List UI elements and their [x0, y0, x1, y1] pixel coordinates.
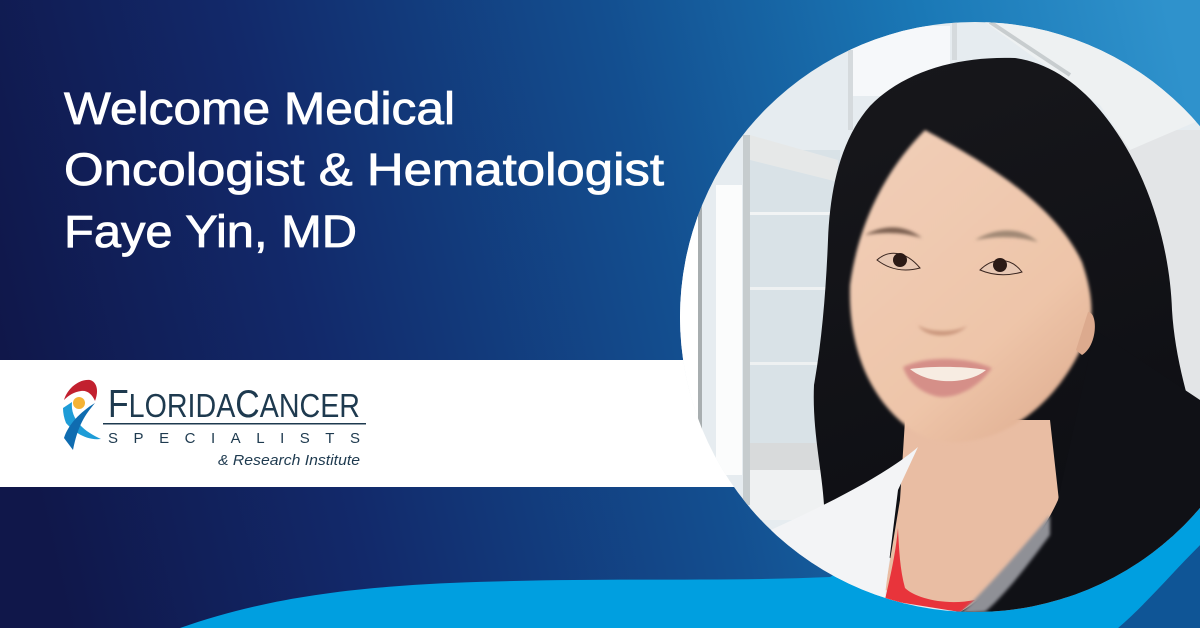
portrait photo: [670, 10, 1200, 628]
left brow: [865, 227, 922, 238]
headline: Welcome Medical: [64, 83, 455, 134]
white coat: [771, 447, 918, 604]
teeth: [910, 367, 986, 381]
face: [850, 130, 1092, 442]
left eye: [877, 253, 920, 270]
window background: [670, 10, 1200, 628]
headline: Faye Yin, MD: [64, 206, 357, 257]
right brow: [975, 230, 1038, 242]
bottom right corner: [1118, 545, 1200, 628]
ear: [1076, 312, 1095, 355]
lips: [903, 359, 992, 397]
red shirt: [885, 528, 975, 612]
logo: [63, 380, 366, 469]
neck: [885, 420, 1060, 612]
grey hair strands: [960, 515, 1050, 614]
headline: Oncologist & Hematologist: [64, 144, 665, 195]
logo wordmark: FLORIDACANCER: [108, 383, 360, 426]
logo subtitle: SPECIALISTS: [108, 430, 360, 447]
bottom wave: [180, 400, 1200, 628]
hair: [814, 58, 1200, 614]
logo icon: ribbon: [63, 380, 101, 450]
white logo band: [0, 360, 760, 487]
nose: [918, 325, 968, 336]
logo tagline: & Research Institute: [218, 452, 360, 469]
front hair strand: [966, 390, 1200, 612]
right eye: [980, 258, 1022, 275]
logo rule: [103, 423, 366, 424]
